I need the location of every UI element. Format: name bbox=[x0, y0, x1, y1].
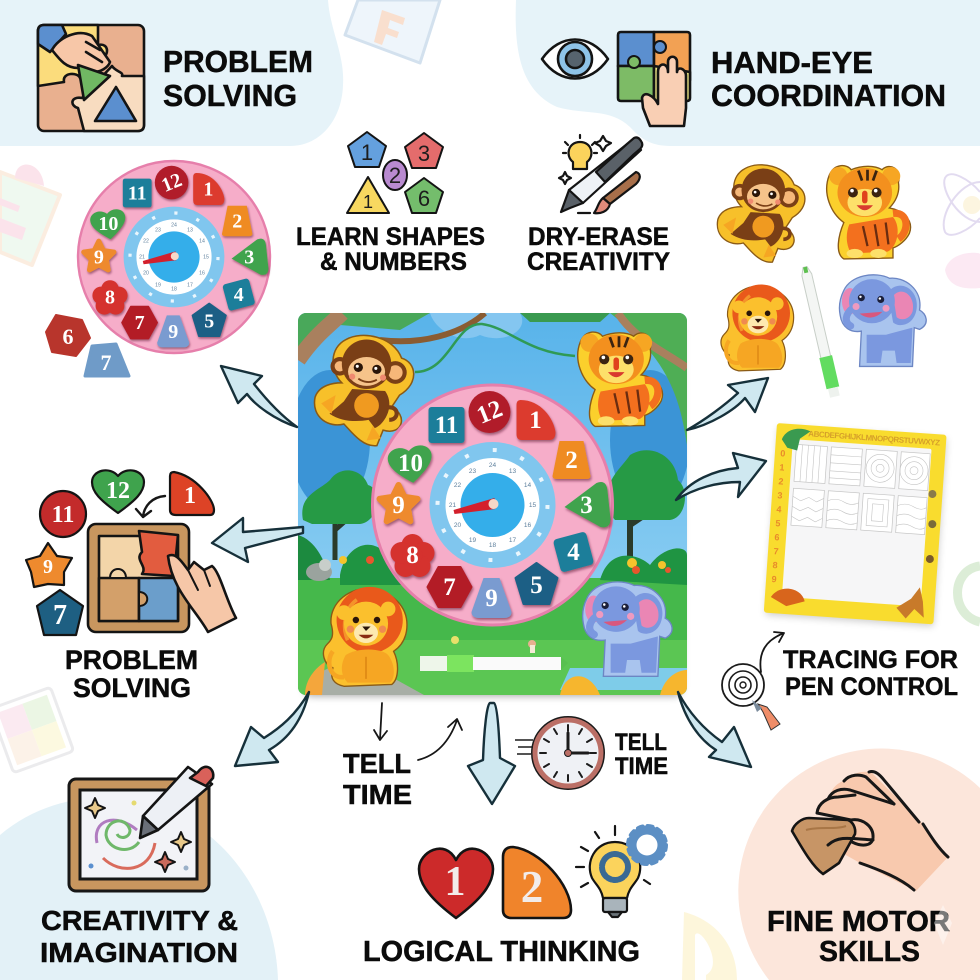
clock toy: 22 bbox=[454, 482, 461, 489]
clock toy: 19 bbox=[155, 283, 161, 289]
clock toy: 20 bbox=[454, 522, 461, 529]
clock toy: 23 bbox=[469, 468, 476, 475]
faint icon: ring bbox=[958, 566, 980, 622]
clock toy: 17 bbox=[187, 283, 193, 289]
clock toy: 12 bbox=[473, 395, 506, 430]
heading text bbox=[711, 45, 946, 113]
arrow: to problem solving bbox=[212, 518, 303, 562]
clock toy: 18 bbox=[171, 287, 177, 293]
label bbox=[65, 645, 198, 703]
label: left bbox=[343, 748, 412, 810]
clock toy: 9 bbox=[392, 492, 405, 519]
piece numbers: 7 bbox=[53, 600, 67, 631]
clock toy: 17 bbox=[509, 537, 516, 544]
panel: tell time bbox=[343, 703, 668, 810]
heading text: SOLVING bbox=[163, 78, 297, 113]
label: left: TIME bbox=[343, 779, 412, 810]
label: FINE MOTOR bbox=[767, 906, 950, 938]
clock toy bbox=[78, 161, 270, 353]
shape numbers: 1 bbox=[361, 140, 373, 165]
clock toy: 16 bbox=[524, 522, 531, 529]
clock toy: 1 bbox=[529, 407, 542, 434]
icon: hand gripping block bbox=[792, 772, 948, 891]
arrow: to creativity bbox=[235, 692, 309, 766]
clock toy: 9 bbox=[485, 585, 498, 612]
corner blob: bottom left bbox=[0, 797, 278, 980]
clock toy: 9 bbox=[94, 246, 104, 268]
tracing board: 8 bbox=[772, 560, 778, 570]
shape numbers: 3 bbox=[418, 141, 430, 166]
corner blob: bottom right bbox=[738, 748, 980, 980]
arrow: to fine motor skills bbox=[678, 692, 751, 767]
clock toy: 11 bbox=[128, 182, 147, 204]
icon: clock bbox=[515, 717, 604, 789]
clock toy: 19 bbox=[469, 537, 476, 544]
small arrow: up curve bbox=[418, 719, 462, 760]
clock toy: 24 bbox=[489, 462, 496, 469]
panel: problem solving heading bbox=[38, 25, 313, 131]
small arrow: down bbox=[374, 703, 387, 740]
tracing board: ABCDEFGHIJKLMNOPQRSTUVWXYZ bbox=[808, 429, 940, 447]
faint icon: puzzle frame bbox=[0, 687, 74, 773]
animal: tiger piece bbox=[827, 166, 911, 259]
label: right: TELL bbox=[615, 729, 667, 756]
clock toy: 2 bbox=[565, 447, 578, 474]
label: left: TELL bbox=[343, 748, 411, 779]
icon: drawing board with pen bbox=[69, 767, 213, 891]
icon: small arrow bbox=[136, 496, 165, 517]
clock toy: 22 bbox=[143, 239, 149, 245]
marker pen bbox=[420, 655, 568, 672]
clock toy: 1 bbox=[203, 178, 213, 200]
panel: creativity and imagination bbox=[40, 767, 238, 968]
clock toy: 7 bbox=[135, 312, 145, 334]
tracing board: 1 bbox=[779, 462, 785, 473]
arrow: to animal pieces bbox=[687, 378, 768, 430]
panel: tracing for pen control bbox=[722, 632, 958, 730]
faint icon: tablet bbox=[345, 0, 440, 63]
icon: numbered shapes bbox=[347, 132, 443, 213]
label: PROBLEM bbox=[65, 645, 198, 675]
label: LEARN SHAPES bbox=[296, 223, 485, 251]
faint icon: clipboard bbox=[0, 165, 60, 265]
label bbox=[40, 905, 238, 968]
tracing board: 3 bbox=[777, 490, 783, 501]
icon: heart piece: 1 bbox=[444, 859, 466, 905]
clock toy: 21 bbox=[139, 255, 145, 261]
heading text: HAND-EYE bbox=[711, 45, 873, 80]
icon: puzzle with hand bbox=[38, 25, 144, 131]
animal: monkey piece bbox=[717, 165, 805, 262]
arrow: to small clock bbox=[221, 366, 297, 427]
icon: heart piece bbox=[419, 849, 493, 918]
clock toy: 15 bbox=[203, 255, 209, 261]
loose piece: 6 bbox=[46, 315, 90, 356]
label: & NUMBERS bbox=[320, 248, 467, 276]
tracing board: 2 bbox=[778, 476, 784, 487]
label: right bbox=[615, 729, 668, 780]
heading text: COORDINATION bbox=[711, 78, 946, 113]
animal: lion piece bbox=[721, 284, 794, 371]
clock toy: 13 bbox=[187, 227, 193, 233]
faint icon: ruler bbox=[682, 912, 737, 980]
tracing board bbox=[764, 423, 947, 626]
clock toy: 24 bbox=[171, 223, 177, 229]
panel: problem solving activity bbox=[26, 470, 236, 703]
header blob: top left bbox=[0, 0, 343, 146]
clock toy: 2 bbox=[232, 210, 242, 232]
small arrow: up to board bbox=[760, 632, 784, 672]
label bbox=[783, 646, 958, 701]
label bbox=[296, 223, 485, 276]
shape numbers: 2 bbox=[389, 163, 401, 188]
piece numbers: 11 bbox=[52, 502, 74, 528]
heading text: PROBLEM bbox=[163, 44, 313, 79]
label bbox=[767, 906, 950, 968]
clock toy: 9 bbox=[168, 321, 178, 343]
clock toy: 5 bbox=[530, 572, 543, 599]
piece numbers: 9 bbox=[43, 556, 53, 578]
icon: eye bbox=[542, 40, 608, 78]
tracing board: 4 bbox=[776, 504, 782, 515]
tracing board: 5 bbox=[775, 518, 781, 528]
clock toy: 4 bbox=[234, 284, 244, 306]
clock toy: 10 bbox=[98, 213, 118, 235]
loose piece: 7: 7 bbox=[100, 350, 112, 375]
panel: hand-eye coordination heading bbox=[542, 32, 946, 126]
clock toy: 20 bbox=[143, 271, 149, 277]
heading text bbox=[163, 44, 313, 113]
tracing board: 9 bbox=[771, 574, 777, 584]
clock toy: 12 bbox=[158, 169, 185, 197]
icon: puzzle with hand bbox=[618, 32, 690, 126]
tracing board: 6 bbox=[774, 532, 780, 542]
animal: elephant bbox=[583, 582, 672, 676]
clock toy: 3 bbox=[244, 246, 254, 268]
clock toy: 15 bbox=[529, 502, 536, 509]
panel: logical thinking bbox=[363, 826, 666, 968]
clock toy: 8 bbox=[406, 542, 419, 569]
clock toy: 16 bbox=[199, 271, 205, 277]
clock toy: 13 bbox=[509, 468, 516, 475]
piece numbers: 12 bbox=[106, 478, 130, 504]
shape numbers bbox=[361, 140, 430, 212]
label: TRACING FOR bbox=[783, 646, 958, 674]
clock toy: 14 bbox=[524, 482, 531, 489]
animal pieces and marker: top right bbox=[717, 165, 926, 398]
label: LOGICAL THINKING bbox=[363, 936, 640, 968]
panel: fine motor skills bbox=[767, 772, 952, 968]
arrow: to logical thinking bbox=[468, 703, 515, 804]
arrow: to tracing board bbox=[676, 453, 766, 500]
label: PEN CONTROL bbox=[785, 673, 958, 701]
loose piece: 6: 6 bbox=[62, 324, 74, 349]
animal: elephant piece bbox=[839, 275, 926, 366]
animal: tiger bbox=[578, 332, 663, 426]
clock toy: 3 bbox=[580, 492, 593, 519]
board shadow bbox=[304, 322, 682, 696]
clock toy: 5 bbox=[204, 310, 214, 332]
label: IMAGINATION bbox=[40, 937, 238, 968]
piece numbers: 1 bbox=[184, 483, 196, 509]
label: CREATIVITY bbox=[527, 248, 670, 276]
shape numbers: 1 bbox=[363, 192, 373, 212]
icon: light bulb and gears bbox=[576, 826, 666, 917]
clock toy: 23 bbox=[155, 227, 161, 233]
icon: marker, bulb and brush bbox=[559, 135, 642, 213]
icon: quarter piece: 2 bbox=[521, 862, 543, 912]
icon: number pieces bbox=[26, 470, 214, 635]
animal: monkey bbox=[314, 335, 414, 446]
animal: lion bbox=[323, 587, 407, 686]
icon: spiral with pen bbox=[722, 664, 780, 730]
label bbox=[527, 223, 670, 276]
panel: dry-erase creativity bbox=[527, 135, 670, 276]
tracing board: 0 bbox=[780, 448, 786, 459]
panel: learn shapes and numbers bbox=[296, 132, 485, 276]
clock toy bbox=[372, 385, 612, 625]
clock toy: 21 bbox=[449, 502, 456, 509]
clock toy: 14 bbox=[199, 239, 205, 245]
label: CREATIVITY & bbox=[41, 905, 238, 936]
board scene bbox=[290, 313, 690, 695]
watermark sparkle bbox=[934, 905, 952, 945]
tracing board: 7 bbox=[773, 546, 779, 556]
shape clock photo: top left bbox=[46, 161, 270, 376]
label: right: TIME bbox=[615, 753, 668, 780]
label: SOLVING bbox=[73, 673, 191, 703]
header blob: top right bbox=[516, 0, 980, 146]
clock toy: 11 bbox=[435, 412, 458, 439]
shape numbers: 6 bbox=[418, 186, 430, 211]
clock toy: 7 bbox=[443, 574, 456, 601]
clock toy: 10 bbox=[398, 450, 423, 477]
loose piece: 7 bbox=[85, 344, 129, 376]
marker pen bbox=[799, 266, 841, 398]
icon: quarter piece bbox=[503, 847, 571, 918]
clock toy: 18 bbox=[489, 542, 496, 549]
label: DRY-ERASE bbox=[528, 223, 669, 251]
faint icon: atom and flask bbox=[944, 174, 980, 288]
faint icon: tablet letter bbox=[374, 10, 405, 45]
label: SKILLS bbox=[819, 936, 920, 968]
clock toy: 4 bbox=[567, 539, 580, 566]
clock toy: 8 bbox=[105, 286, 115, 308]
icon: puzzle frame with hand bbox=[88, 524, 236, 632]
piece numbers bbox=[43, 478, 196, 631]
central board toy bbox=[290, 313, 690, 696]
